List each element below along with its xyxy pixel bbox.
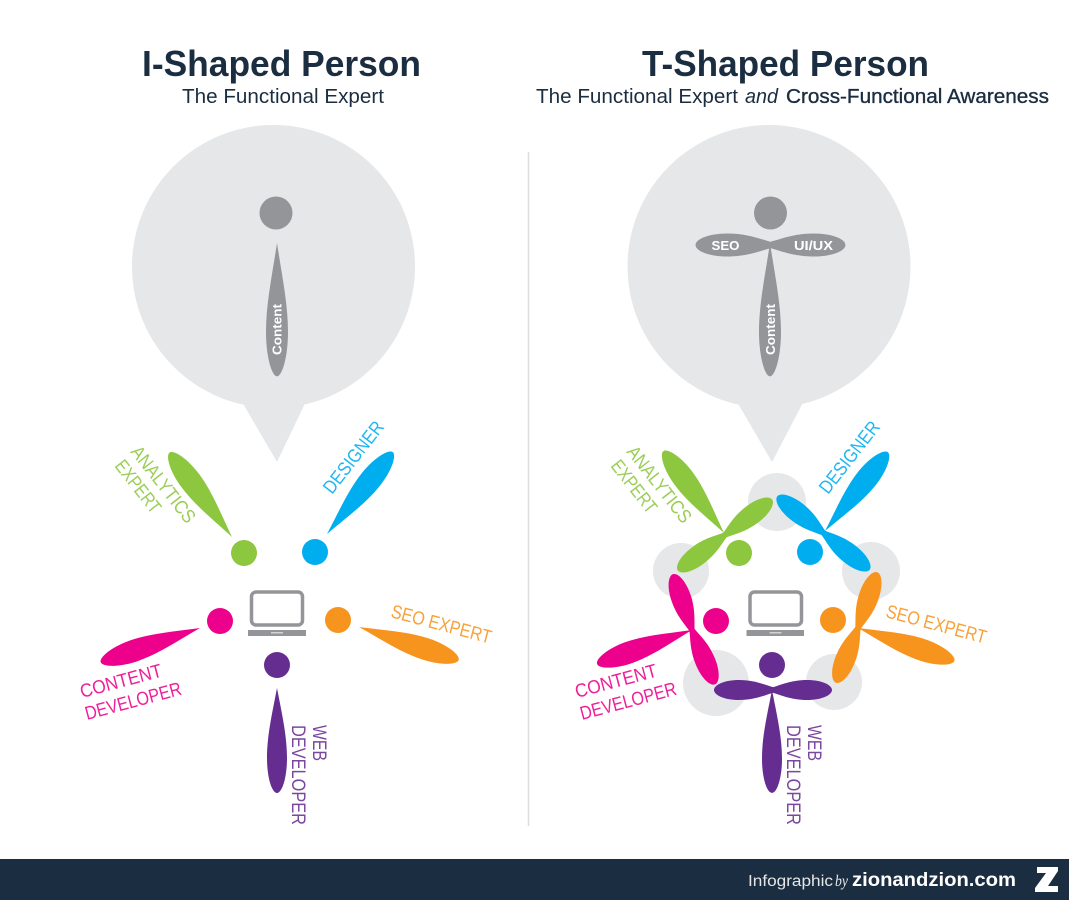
T-shaped figure: UI/UX (794, 238, 833, 253)
footer credit: zionandzion.com (852, 870, 1016, 891)
role: content developer: DEVELOPER (83, 679, 184, 725)
subtitle: The Functional Expert: The Functional Expert (182, 86, 384, 108)
role: analytics expert: EXPERT (110, 456, 165, 518)
role: content developer: DEVELOPER (578, 679, 679, 725)
role: content developer (573, 571, 729, 725)
panel: T-shaped person (536, 43, 1049, 825)
subtitle: functional expert and cross-functional awareness: The Functional Expert (536, 86, 738, 108)
speech bubble (628, 125, 910, 462)
role: designer (302, 417, 401, 565)
role: content developer: CONTENT (78, 661, 165, 703)
footer credit (748, 870, 1016, 891)
role: analytics expert: EXPERT (606, 456, 661, 518)
subtitle: functional expert and cross-functional awareness (536, 86, 1049, 108)
icon: Z logo (1035, 867, 1058, 892)
role: analytics expert (110, 442, 257, 566)
role: analytics expert: ANALYTICS (622, 442, 695, 528)
role: SEO expert: SEO EXPERT (389, 602, 494, 649)
I-shaped figure (260, 196, 292, 376)
I-shaped figure: Content (270, 303, 284, 355)
role: web developer: WEB (308, 725, 329, 761)
T-shaped figure: SEO (712, 238, 740, 253)
role: web developer (714, 652, 832, 825)
icon: laptop (746, 592, 804, 636)
subtitle: functional expert and cross-functional awareness: and (745, 86, 779, 108)
role: designer: DESIGNER (815, 417, 885, 498)
panel: I-shaped person (78, 43, 494, 825)
T-shaped figure: Content (763, 303, 778, 355)
cross-functional background circles (653, 473, 900, 716)
footer bar (0, 859, 1069, 900)
role: web developer (264, 652, 329, 825)
role: web developer: DEVELOPER (782, 725, 803, 825)
role: designer (771, 417, 896, 578)
role: SEO expert (325, 602, 494, 670)
title: I-Shaped Person: I-Shaped Person (142, 43, 421, 84)
title: T-Shaped Person: T-Shaped Person (642, 43, 929, 84)
role: analytics expert (606, 442, 778, 578)
role: content developer (78, 608, 233, 725)
role: SEO expert (820, 569, 989, 686)
role: designer: DESIGNER (319, 417, 389, 498)
role: content developer: CONTENT (573, 661, 660, 703)
speech bubble (132, 125, 415, 462)
role: analytics expert: ANALYTICS (126, 442, 199, 528)
T-shaped figure (696, 196, 845, 376)
footer credit: Infographic (748, 873, 833, 890)
subtitle: functional expert and cross-functional awareness: Cross-Functional Awareness (786, 86, 1049, 108)
role: web developer: DEVELOPER (287, 725, 308, 825)
icon: laptop (248, 592, 306, 636)
footer credit: by (835, 873, 849, 890)
role: SEO expert: SEO EXPERT (884, 602, 989, 649)
role: web developer: WEB (803, 725, 824, 761)
